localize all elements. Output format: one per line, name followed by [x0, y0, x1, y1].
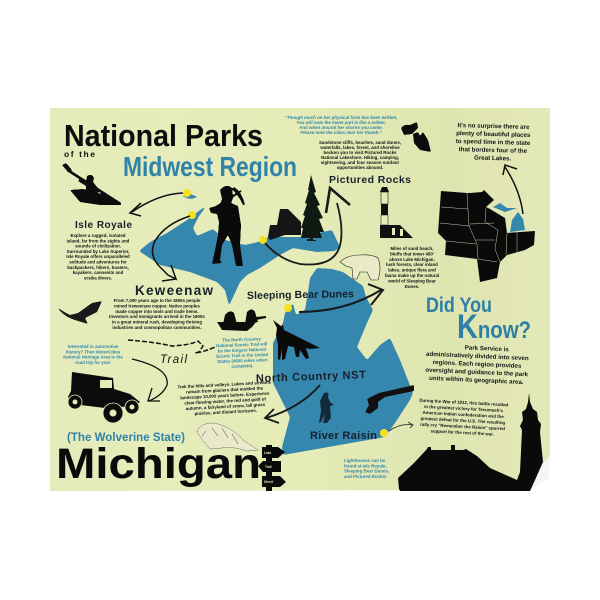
title: Michigan: Michigan — [56, 440, 261, 488]
text: Sleeping Bear description: Dunes. — [405, 284, 419, 289]
text: Sleeping Bear description: Miles of sand beach, — [391, 246, 433, 251]
text: Park Service fact: administratively divided into seven — [426, 351, 529, 362]
text: MotorCities note: National Heritage Area is the — [63, 355, 123, 360]
text: North Country Trail note — [215, 336, 269, 369]
icon: bear outline — [340, 255, 380, 280]
marker: Keweenaw — [188, 211, 196, 219]
map: Michigan upper peninsula — [139, 204, 340, 306]
text: Park Service fact: regions. Each region provides — [433, 359, 522, 370]
dashed trail — [128, 340, 215, 353]
icon: howling wolf — [273, 320, 320, 360]
quote: You will note the lower part is like a mitten, — [296, 120, 386, 125]
heading: North Country NST: North Country NST — [256, 369, 366, 385]
text: War of 1812 fact: support for the rest of the war. — [430, 428, 494, 437]
text: MotorCities note: road trip for you! — [75, 360, 111, 365]
quote: Please note the cities near her thumb.” — [300, 130, 382, 135]
text: Sleeping Bear description: lakes, unique flora and — [388, 268, 436, 273]
text: lighthouses note: and Pictured Rocks! — [344, 474, 387, 479]
title: National Parks: National Parks — [64, 118, 263, 153]
text: Sleeping Bear description: lush forests, clear inland — [386, 262, 438, 267]
text: lighthouses note: found at Isle Royale, — [344, 463, 387, 468]
arrow: to Isle Royale kayak — [130, 193, 183, 216]
text: War of 1812 fact: greatest defeat for the U.S. The resulting — [420, 416, 506, 425]
map: Midwest states — [438, 190, 535, 282]
text: Keweenaw description: industries and cosmopolitan communities. — [112, 325, 202, 330]
text: North Country Trail note: complete). — [231, 363, 254, 369]
text: War of 1812 fact — [418, 398, 509, 437]
quote: And when around her shores you come, — [298, 125, 383, 130]
text: Pictured Rocks description: waterfalls, lakes, forest, and shoreline — [319, 145, 400, 150]
text: Isle Royale description: Surrounded by Lake Superior, — [67, 249, 129, 254]
arrow: to North Country text — [265, 385, 320, 423]
marker: Pictured Rocks — [259, 236, 267, 244]
text: Sleeping Bear description: bluffs that tower 450' — [390, 251, 434, 256]
text: Park Service fact: Park Service is — [465, 344, 509, 353]
text: North Country Trail note: States (4600 miles when — [217, 357, 268, 364]
text: no surprise intro — [455, 122, 531, 163]
arrow: to Pictured Rocks — [265, 188, 350, 264]
text: Keweenaw description: mined Keweenaw copper. Native peoples — [114, 303, 200, 308]
map: Michigan lower peninsula — [273, 268, 413, 455]
icon: trail signpost: Street — [264, 480, 274, 484]
text: Sleeping Bear description: above Lake Michigan, — [389, 257, 435, 262]
icon: flintlock pistol — [365, 385, 414, 414]
text: North Country description: clear-flowing water, the red and gold of — [184, 396, 267, 406]
icon: trail signpost — [258, 445, 286, 491]
title: Midwest Region: Midwest Region — [123, 151, 297, 182]
text: lighthouses note: Sleeping Bear Dunes, — [344, 469, 389, 474]
text: North Country description: landscape 10,000 years before. Experience — [180, 391, 270, 400]
heading: Isle Royale: Isle Royale — [75, 220, 132, 231]
text: no surprise intro: plenty of beautiful places — [456, 130, 531, 139]
text: North Country description — [177, 380, 273, 417]
text: Isle Royale description: kayakers, canoeists and — [73, 270, 124, 275]
poster background — [50, 108, 550, 491]
text: Sleeping Bear description: fauna make up the natural — [385, 273, 439, 278]
text: Isle Royale description: island, far from the sights and — [67, 238, 130, 243]
text: Isle Royale description: Explore a rugged, isolated — [71, 233, 126, 238]
text: North Country description: Trek the hills and valleys. Lakes and streams — [177, 380, 272, 389]
text: North Country description: autumn, a fairyland of snow, tall grass — [186, 402, 266, 411]
text: North Country Trail note: National Scenic Trail will — [216, 341, 267, 348]
text: no surprise intro: to spend time in the state — [456, 138, 531, 147]
text: North Country Trail note: Scenic Trail in the United — [216, 352, 269, 359]
text: Pictured Rocks description: Sandstone cliffs, beaches, sand dunes, — [319, 140, 401, 145]
subtitle: of the: of the — [64, 149, 95, 159]
text: Keweenaw description: in a great mineral rush, developing thriving — [112, 320, 202, 325]
label: Trail: Trail — [160, 354, 187, 366]
text: Isle Royale description: solitude and adventures for — [69, 260, 127, 264]
text: Park Service fact — [425, 343, 530, 386]
text: North Country description: prairies, and distant horizons. — [194, 408, 257, 416]
text: Pictured Rocks description: sightseeing, and four season outdoor — [321, 160, 400, 165]
text: Park Service fact: oversight and guidance to the park — [425, 367, 529, 378]
icon: cabin — [268, 209, 301, 240]
arrow: to Sleeping Bear — [299, 284, 383, 312]
quote: “Though much on her physical form has been written, — [285, 115, 397, 120]
text: Isle Royale description: sounds of civilization. — [75, 244, 121, 249]
text: Isle Royale description: Isle Royale offers unparalleled — [66, 254, 130, 259]
text: Keweenaw description: Investors and immigrants arrived in the 1800s — [109, 314, 205, 319]
icon: mitten hand — [401, 122, 431, 152]
heading: Keweenaw: Keweenaw — [135, 283, 213, 298]
text: War of 1812 fact: During the War of 1812, this battle resulted — [419, 398, 509, 407]
text: Sleeping Bear description: world of Sleeping Bear — [387, 278, 436, 283]
heading: Did You: Did You — [426, 294, 492, 317]
icon: vintage car — [68, 372, 140, 423]
icon: Isle Royale on the map — [183, 189, 197, 199]
icon: trail signpost: Trail — [265, 465, 272, 469]
marker: River Raisin — [380, 429, 388, 437]
text: Keweenaw description: made copper into tools and trade items. — [115, 309, 199, 314]
icon: lighthouse — [380, 187, 413, 238]
arrow: to River Raisin note — [389, 422, 413, 431]
text: North Country Trail note: be the longest National — [218, 347, 266, 353]
icon: wolverine sketch — [197, 423, 258, 451]
icon: lighthouse and keeper house silhouette — [398, 393, 543, 491]
text: no surprise intro: that borders four of the — [459, 146, 528, 155]
icon: eagle — [57, 301, 102, 324]
icon: canoe with paddlers — [217, 310, 266, 331]
arrow: to car — [132, 359, 167, 401]
text: Keweenaw description: From 7,000 years ago to the 1800s people — [114, 298, 201, 303]
arrow: to Michigan on regional map — [503, 165, 523, 214]
arrow: to Keweenaw — [152, 216, 190, 281]
text: North Country Trail note: The North Country — [222, 336, 262, 343]
icon: hiker — [319, 392, 334, 423]
text: Park Service fact: units within its geographic area. — [429, 375, 524, 386]
heading: River Raisin: River Raisin — [310, 430, 377, 442]
text: no surprise intro: Great Lakes. — [474, 155, 512, 162]
text: MotorCities note: history? Then MotorCities — [66, 349, 121, 354]
text: Isle Royale description: backpackers, hikers, boaters, — [67, 265, 129, 270]
text: War of 1812 fact: American Indian confederation and the — [422, 410, 504, 419]
text: Pictured Rocks description: National Lakeshore. Hiking, camping, — [321, 155, 399, 160]
text: lighthouses note: Lighthouses can be — [344, 458, 386, 463]
heading: Know?: Know? — [457, 308, 531, 346]
text: North Country description: remain from glaciers that molded the — [186, 385, 264, 395]
icon: pine tree — [301, 175, 324, 241]
text: Isle Royale description: scuba divers. — [84, 275, 112, 280]
text: War of 1812 fact: in the greatest victory for Tecumseh's — [424, 404, 504, 413]
icon: trail signpost: Lake — [264, 451, 271, 455]
icon: miner silhouette — [209, 186, 245, 266]
heading: The Wolverine State: (The Wolverine State) — [67, 432, 185, 444]
heading: Sleeping Bear Dunes: Sleeping Bear Dunes — [247, 288, 354, 302]
text: Pictured Rocks description: beckon you to visit Pictured Rocks — [324, 150, 397, 155]
icon: kayaker — [62, 163, 122, 205]
text: no surprise intro: It's no surprise there are — [457, 122, 530, 131]
marker: Sleeping Bear — [284, 304, 292, 312]
heading: Pictured Rocks: Pictured Rocks — [329, 174, 411, 186]
text: Pictured Rocks description: opportunities abound. — [337, 165, 383, 170]
text: War of 1812 fact: rally cry "Remember the Raisin" spurred — [420, 422, 505, 431]
text: MotorCities note: Interested in automotive — [68, 344, 119, 349]
